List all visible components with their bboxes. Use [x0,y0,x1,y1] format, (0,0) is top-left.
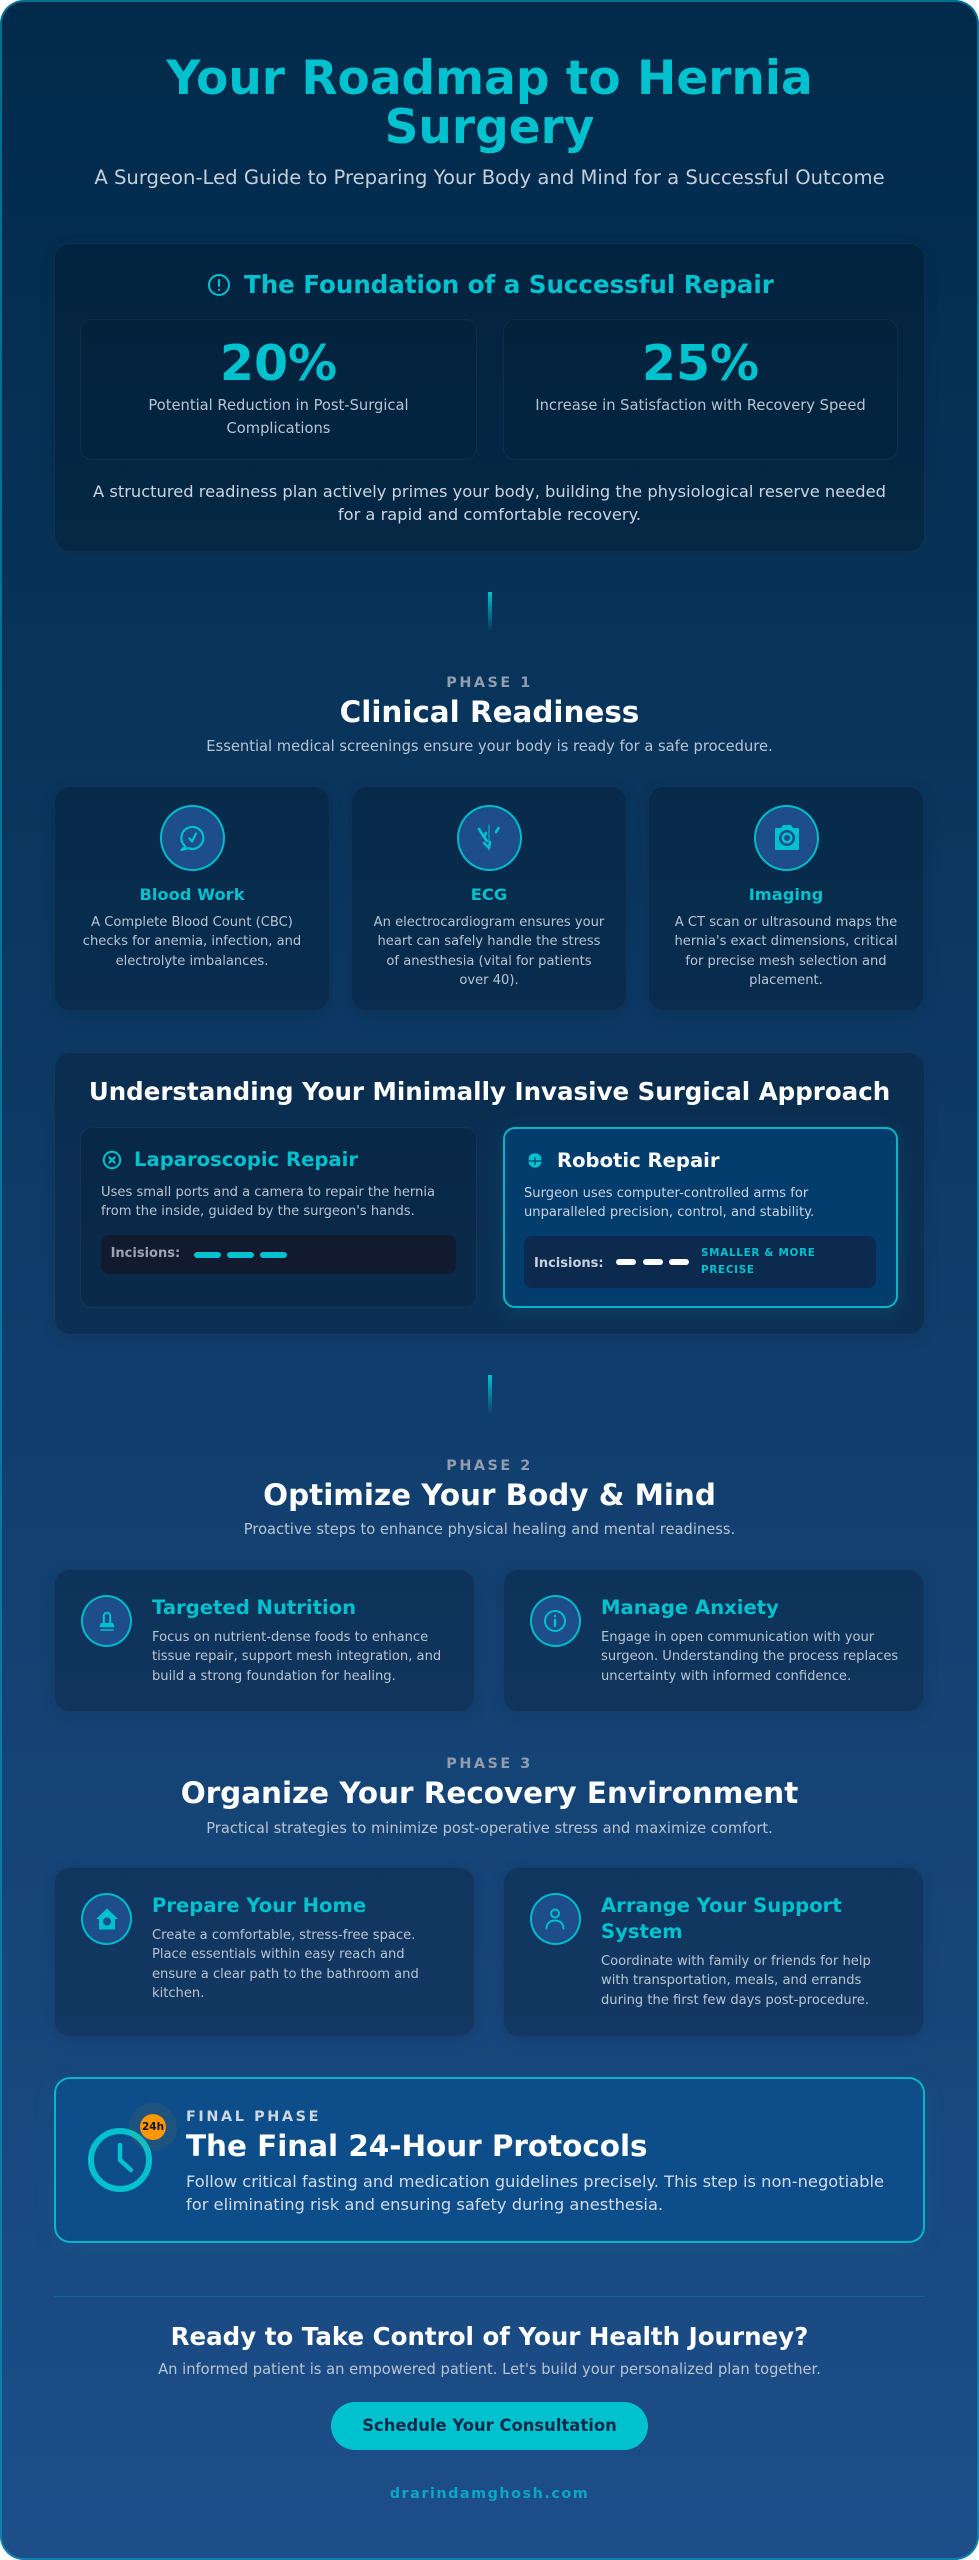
card title: Laparoscopic Repair [134,1148,358,1171]
icon: ecg [457,805,522,871]
icon: home [81,1893,132,1945]
incisions note: PRECISE [701,1264,755,1276]
foundation paragraph: A structured readiness plan actively primes your body, building the physiological reserve needed [93,482,886,501]
incisions label: Incisions: [111,1246,180,1260]
card text: checks for anemia, infection, and [83,934,301,949]
icon: clock [88,2128,152,2192]
phase 1 heading: Clinical Readiness [340,695,639,729]
card text: ensure a clear path to the bathroom and [152,1967,419,1982]
card text [152,1630,441,1684]
final phase label: FINAL PHASE [186,2109,321,2125]
card title: Blood Work [139,885,245,904]
card text: electrolyte imbalances. [116,954,268,969]
card: blood work [54,786,330,1011]
card: arrange your support system [503,1867,924,2037]
card text [152,1928,419,2001]
phase 1 label: PHASE 1 [446,675,533,691]
card text: over 40). [459,973,519,988]
title: Your Roadmap to Hernia [166,51,813,106]
card text: tissue repair, support mesh integration, and [152,1649,441,1664]
incisions bar [101,1235,456,1274]
icon: x circle [102,1150,122,1170]
card title: Imaging [749,885,823,904]
card text [601,1630,898,1684]
card: imaging [648,786,924,1011]
card text: placement. [749,973,823,988]
card text: An electrocardiogram ensures your [374,915,604,930]
card text: Engage in open communication with your [601,1630,874,1645]
card text: with transportation, meals, and errands [601,1973,861,1988]
card text: during the first few days post-procedure. [601,1993,869,2008]
incision marks [616,1259,689,1265]
badge: 24h [140,2114,166,2140]
card: ecg [351,786,627,1011]
card text: kitchen. [152,1986,204,2001]
card text: of anesthesia (vital for patients [386,954,592,969]
final phase heading: The Final 24-Hour Protocols [186,2129,648,2163]
icon: clock with badge [88,2103,177,2192]
stat label [148,397,409,437]
phase 3 subheading: Practical strategies to minimize post-operative stress and maximize comfort. [206,1820,773,1837]
title [166,51,813,155]
card title: Targeted Nutrition [152,1596,356,1619]
icon: info [530,1595,580,1647]
button: schedule consultation [331,2402,648,2450]
badge: 24h: 24h [142,2121,164,2133]
card: prepare your home [54,1867,475,2037]
card title: Arrange Your Support [601,1894,842,1917]
stat value: 25% [642,335,759,392]
card: laparoscopic repair [80,1127,477,1308]
incisions label: Incisions: [534,1256,604,1270]
card title: ECG [471,885,507,904]
phase 2 label: PHASE 2 [446,1458,533,1474]
card text [674,915,897,988]
heading: surgical approach: Understanding Your Minimally Invasive Surgical Approach [89,1076,890,1106]
button: schedule consultation: Schedule Your Consultation [362,2416,617,2435]
incisions note [701,1247,816,1276]
card text: Uses small ports and a camera to repair the hernia [101,1185,435,1200]
card text: Focus on nutrient-dense foods to enhance [152,1630,428,1645]
card title [601,1894,842,1943]
card text: build a strong foundation for healing. [152,1669,396,1684]
card text: Coordinate with family or friends for help [601,1954,871,1969]
icon: imaging [754,805,819,871]
card text: surgeon. Understanding the process replaces [601,1649,898,1664]
card text [101,1185,435,1219]
card: manage anxiety [503,1569,924,1712]
card: robotic repair [503,1127,898,1308]
phase 1 subheading: Essential medical screenings ensure your body is ready for a safe procedure. [206,738,773,755]
card text [374,915,604,988]
incisions note: SMALLER & MORE [701,1247,816,1259]
foundation paragraph [93,482,886,524]
card text: Place essentials within easy reach and [152,1947,405,1962]
call to action heading: Ready to Take Control of Your Health Journey? [171,2322,808,2350]
card text: A Complete Blood Count (CBC) [91,915,293,930]
card text [83,915,301,969]
card text: from the inside, guided by the surgeon's hands. [101,1204,415,1219]
stat label: Potential Reduction in Post-Surgical [148,397,409,414]
foundation paragraph: for a rapid and comfortable recovery. [338,505,641,524]
card text: hernia's exact dimensions, critical [674,934,897,949]
card text: Create a comfortable, stress-free space. [152,1928,415,1943]
card text: unparalleled precision, control, and stability. [524,1205,814,1220]
card title: Manage Anxiety [601,1596,779,1619]
arrow: connector 2 [488,1375,492,1415]
heading: foundation: The Foundation of a Successful Repair [244,270,774,298]
panel: foundation [54,243,925,552]
incision marks [194,1252,287,1258]
incisions bar [524,1236,876,1288]
subtitle: A Surgeon-Led Guide to Preparing Your Body and Mind for a Successful Outcome [94,166,885,189]
icon: blood work [160,805,225,871]
card text: A CT scan or ultrasound maps the [675,915,897,930]
icon: nutrition [81,1595,132,1647]
phase 2 subheading: Proactive steps to enhance physical healing and mental readiness. [244,1521,735,1538]
final phase text: for eliminating risk and ensuring safety during anesthesia. [186,2195,663,2214]
arrow: connector 1 [488,592,492,632]
card text [524,1186,814,1220]
panel: surgical approach [54,1052,925,1335]
icon: person [530,1893,580,1945]
card text: Surgeon uses computer-controlled arms for [524,1186,808,1201]
card: targeted nutrition [54,1569,475,1712]
stat label: Increase in Satisfaction with Recovery Speed [535,397,866,414]
title: Surgery [385,100,594,155]
card title: Robotic Repair [557,1149,720,1172]
icon: alert circle [208,274,230,296]
card text: heart can safely handle the stress [378,934,600,949]
card text [601,1954,871,2008]
final phase text [186,2172,884,2214]
stat label: Complications [227,420,330,437]
stat: 20 percent [80,319,477,460]
icon: robot [528,1153,542,1168]
card title: System [601,1920,683,1943]
stat value: 20% [220,335,337,392]
call to action text: An informed patient is an empowered patient. Let's build your personalized plan together. [158,2361,821,2378]
phase 3 heading: Organize Your Recovery Environment [181,1776,798,1810]
card text: uncertainty with informed confidence. [601,1669,851,1684]
card title: Prepare Your Home [152,1894,366,1917]
phase 2 heading: Optimize Your Body & Mind [263,1478,716,1512]
card text: for precise mesh selection and [685,954,887,969]
panel: final phase [54,2077,925,2243]
final phase text: Follow critical fasting and medication guidelines precisely. This step is non-negotiable [186,2172,884,2191]
phase 3 label: PHASE 3 [446,1756,533,1772]
website link: drarindamghosh.com [390,2486,589,2502]
stat: 25 percent [503,319,898,460]
